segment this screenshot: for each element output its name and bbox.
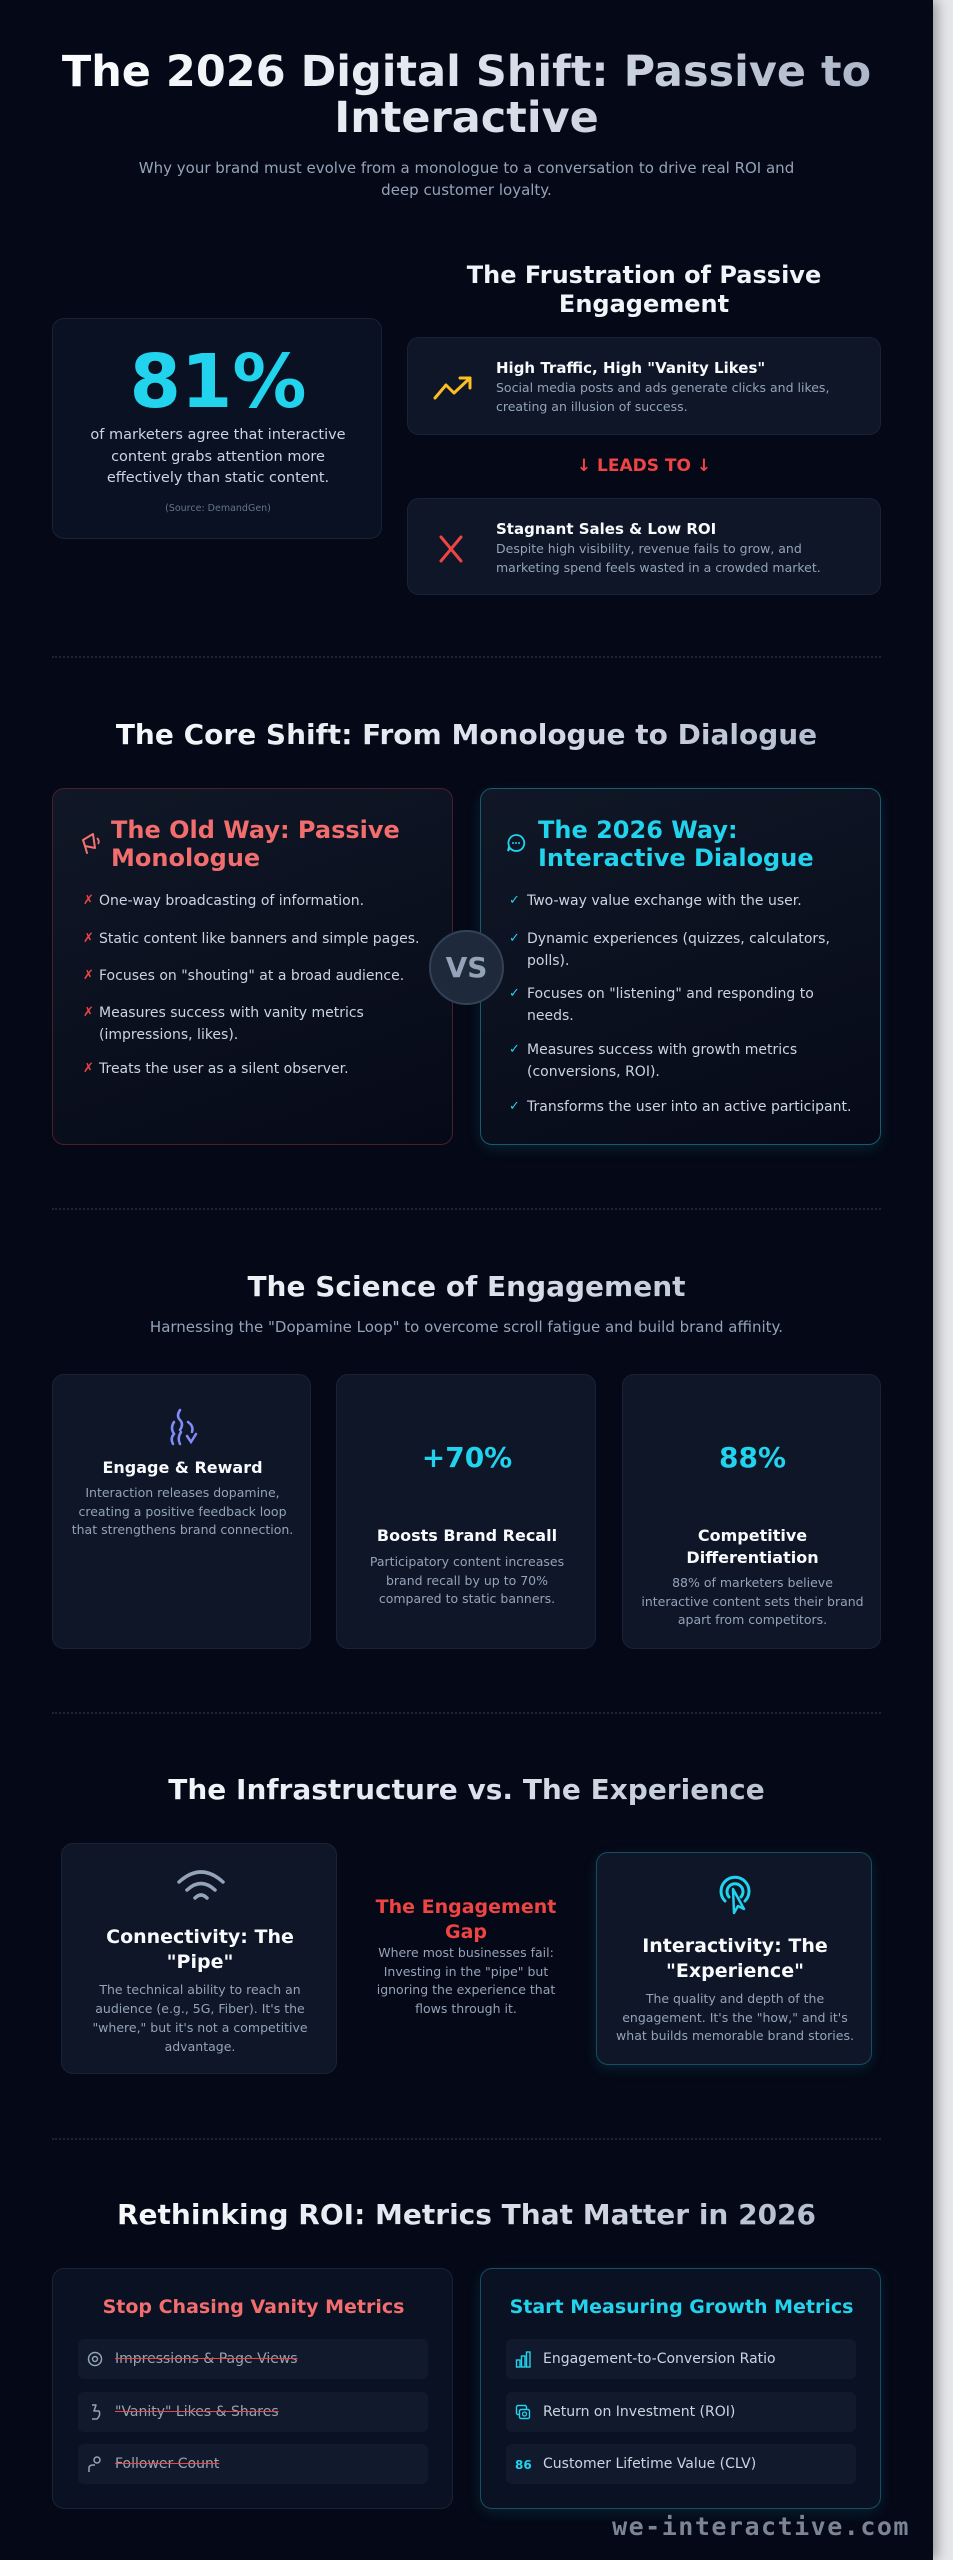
heading: core shift: The Core Shift: From Monologue to Dialogue [116,718,817,751]
bullets: ✓ [509,1099,520,1114]
bullets: Dynamic experiences (quizzes, calculators, polls). [527,931,830,969]
leads to: ↓ LEADS TO ↓ [577,456,711,476]
engagement gap [376,1896,556,2016]
card: interactivity [596,1852,872,2065]
bullets: One-way broadcasting of information. [99,893,364,909]
bullets: Measures success with growth metrics (conversions, ROI). [527,1042,797,1080]
subtitle: science: Harnessing the "Dopamine Loop" to overcome scroll fatigue and build brand affinity. [150,1318,783,1336]
bullets: Two-way value exchange with the user. [527,893,802,909]
panel: old way [52,788,453,1145]
bullets: Transforms the user into an active participant. [527,1099,851,1115]
card: brand recall [336,1374,596,1649]
desc: The technical ability to reach an audience (e.g., 5G, Fiber). It's the "where," but it's not a competitive advantage. [92,1982,308,2054]
title: Connectivity: The [106,1926,294,1948]
vs badge [429,930,504,1005]
item: roi [506,2392,856,2432]
bullets: Treats the user as a silent observer. [99,1061,349,1077]
title [106,1926,294,1973]
item: impressions [78,2339,428,2379]
bullets: ✓ [509,893,520,908]
text: Social media posts and ads generate clicks and likes, creating an illusion of success. [496,380,829,414]
card: differentiation [622,1374,881,1649]
title: Competitive [698,1526,807,1545]
item: clv: Customer Lifetime Value (CLV) [543,2456,756,2472]
panel: 2026 way [480,788,881,1145]
heading: Interactive Dialogue [538,844,814,872]
title [642,1935,828,1982]
card: connectivity [61,1843,337,2074]
title: Boosts Brand Recall [377,1526,557,1545]
heading: science [0,1270,933,1304]
title: Engage & Reward [102,1458,263,1477]
heading: frustration [466,261,821,318]
icon: megaphone [82,833,100,854]
item: likes: "Vanity" Likes & Shares [115,2404,279,2420]
stat: 88% [719,1441,786,1474]
bullets: ✗ [83,1061,94,1076]
item: conversion: Engagement-to-Conversion Ratio [543,2351,776,2367]
title: "Pipe" [167,1951,233,1973]
title: Differentiation [686,1548,819,1567]
title: "Experience" [666,1960,804,1982]
bullets: ✓ [509,931,520,946]
stat: +70% [422,1441,512,1474]
text: Despite high visibility, revenue fails to grow, and marketing spend feels wasted in a crowded market. [496,541,821,575]
gap desc: Where most businesses fail: Investing in the "pipe" but ignoring the experience that flows through it. [377,1945,555,2016]
title [686,1526,819,1567]
panel: vanity metrics [52,2268,453,2509]
stat card: 81% [52,318,382,539]
bullets: Focuses on "shouting" at a broad audience. [99,968,404,984]
bullets [509,893,851,1115]
heading: frustration: The Frustration of Passive [467,261,821,289]
bullets [83,893,419,1077]
icon: trending up [433,376,472,400]
bullets: Measures success with vanity metrics (impressions, likes). [99,1005,364,1043]
bullets: Static content like banners and simple pages. [99,931,419,947]
subtitle: Why your brand must evolve from a monologue to a conversation to drive real ROI and deep customer loyalty. [139,159,794,199]
heading: ROI: Rethinking ROI: Metrics That Matter in 2026 [117,2198,816,2231]
stat number: 81% [129,339,307,425]
bullets: ✓ [509,986,520,1001]
icon: wifi [177,1870,225,1900]
text [496,520,821,575]
heading: Monologue [111,844,260,872]
icon: chat [507,834,526,852]
icon: x [439,535,463,563]
title [20,49,913,141]
gap title: Gap [445,1921,487,1943]
gap title [376,1896,556,1943]
icon: tap [720,1876,750,1914]
heading: The 2026 Way: [538,816,738,844]
text [496,359,829,414]
title: The 2026 Digital Shift: Passive to [62,47,871,97]
bullets: Focuses on "listening" and responding to needs. [527,986,814,1024]
title: Interactive [334,93,599,143]
panel: growth metrics [480,2268,881,2509]
item: clv [506,2444,856,2484]
heading: The Old Way: Passive [111,816,400,844]
desc: The quality and depth of the engagement. It's the "how," and it's what builds memorable brand stories. [616,1991,854,2043]
item: conversion [506,2339,856,2379]
item: roi: Return on Investment (ROI) [543,2404,735,2420]
icon: dopamine [170,1408,198,1446]
heading: Stop Chasing Vanity Metrics [103,2296,404,2318]
title: Interactivity: The [642,1935,828,1957]
desc: Interaction releases dopamine, creating a positive feedback loop that strengthens brand connection. [72,1485,293,1537]
source: (Source: DemandGen) [165,503,271,514]
bullets: ✗ [83,893,94,908]
text: High Traffic, High "Vanity Likes" [496,359,765,377]
vs badge: VS [446,951,487,984]
footer brand: we-interactive.com [612,2512,910,2541]
desc: 88% of marketers believe interactive content sets their brand apart from competitors. [641,1575,864,1627]
text: Stagnant Sales & Low ROI [496,520,716,538]
card: high traffic [407,337,881,435]
card: stagnant sales [407,498,881,595]
bullets: ✓ [509,1042,520,1057]
heading: infrastructure: The Infrastructure vs. The Experience [168,1773,765,1806]
heading: Start Measuring Growth Metrics [510,2296,853,2318]
desc: Participatory content increases brand recall by up to 70% compared to static banners. [370,1554,564,1606]
item: likes [78,2392,428,2432]
bullets: ✗ [83,968,94,983]
heading: infrastructure [0,1773,933,1807]
stat description: of marketers agree that interactive content grabs attention more effectively than static content. [90,427,346,486]
item: followers: Follower Count [115,2456,219,2472]
item: followers [78,2444,428,2484]
heading: science: The Science of Engagement [247,1270,686,1303]
bullets: ✗ [83,931,94,946]
heading: frustration: Engagement [559,290,729,318]
bullets: ✗ [83,1005,94,1020]
gap title: The Engagement [376,1896,556,1918]
item: impressions: Impressions & Page Views [115,2351,298,2367]
heading [111,816,400,872]
card: engage & reward [52,1374,311,1649]
heading [538,816,814,872]
